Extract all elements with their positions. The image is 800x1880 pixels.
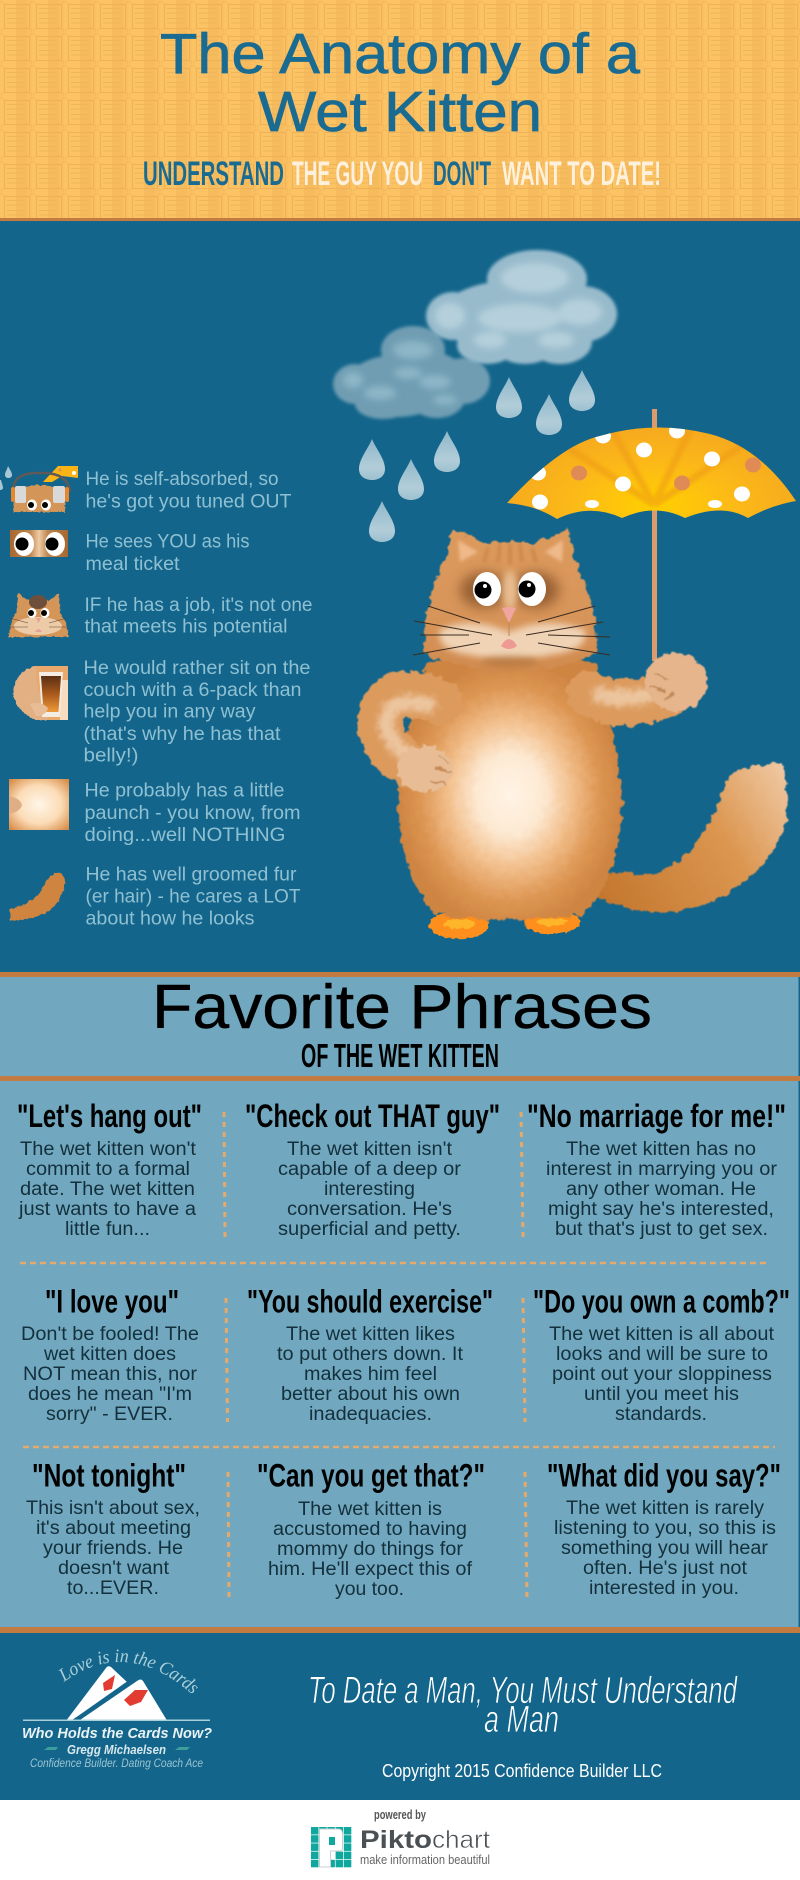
list item: paunch <box>9 779 300 846</box>
text: tuned out: He is self-absorbed, so <box>86 469 278 490</box>
logo: who holds the cards now: Gregg Michaelsen <box>67 1743 166 1757</box>
phrase: can you get that: "Can you get that?" <box>257 1458 485 1494</box>
text: paunch: He probably has a little <box>84 780 284 802</box>
tagline: a Man <box>484 1699 559 1741</box>
phrase: do you own a comb: standards. <box>615 1404 707 1425</box>
text: meal ticket: meal ticket <box>86 554 180 575</box>
text: job: IF he has a job, it's not one <box>84 595 312 616</box>
text: couch: belly!) <box>84 746 138 766</box>
phrase: no marriage for me: might say he's interested, <box>548 1199 774 1220</box>
logo: who holds the cards now <box>22 1649 212 1770</box>
phrase: not tonight: to...EVER. <box>67 1578 159 1599</box>
list item: fur <box>10 864 301 930</box>
text: job: that meets his potential <box>84 616 288 638</box>
phrase: you should exercise: The wet kitten likes <box>286 1324 455 1345</box>
phrase: what did you say: interested in you. <box>589 1578 739 1599</box>
icon: belly crop <box>9 779 69 830</box>
phrase: let's hang out: commit to a formal <box>26 1159 190 1180</box>
heading <box>152 973 652 1074</box>
icon: eyes crop <box>10 530 68 557</box>
phrase: no marriage for me: but that's just to get sex. <box>555 1219 768 1240</box>
phrase: i love you: Don't be fooled! The <box>21 1324 199 1345</box>
subtitle <box>143 155 661 193</box>
phrase: not tonight: "Not tonight" <box>32 1458 186 1494</box>
phrase: not tonight: doesn't want <box>58 1558 170 1579</box>
title: The Anatomy of a <box>160 22 640 86</box>
phrase: can you get that: The wet kitten is <box>298 1499 442 1520</box>
phrase: you should exercise: better about his own <box>281 1384 460 1405</box>
icon: piktochart logo <box>311 1827 351 1867</box>
subtitle: THE GUY YOU <box>292 155 423 193</box>
phrase: not tonight: it's about meeting <box>36 1518 191 1539</box>
icon: eyes <box>473 572 546 606</box>
phrase: can you get that: accustomed to having <box>273 1519 467 1540</box>
icon: head <box>413 529 610 672</box>
icon: rain drops <box>359 370 595 542</box>
phrase: do you own a comb: The wet kitten is all about <box>549 1324 775 1345</box>
phrase: can you get that <box>257 1458 485 1600</box>
icon: nose and mouth <box>501 607 517 649</box>
text: couch <box>84 658 310 766</box>
phrase: no marriage for me: interest in marrying you or <box>546 1159 778 1180</box>
text: fur: (er hair) - he cares a LOT <box>86 886 301 908</box>
wordmark: make information beautiful <box>360 1853 490 1867</box>
phrase: not tonight <box>26 1458 200 1599</box>
text: fur <box>86 864 301 930</box>
phrase: not tonight: your friends. He <box>43 1538 183 1559</box>
logo: who holds the cards now: Who Holds the Cards Now? <box>22 1725 212 1742</box>
icon: body <box>398 652 622 920</box>
subtitle: UNDERSTAND <box>143 155 284 193</box>
phrase: i love you: does he mean "I'm <box>28 1384 192 1405</box>
phrase: do you own a comb: point out your sloppiness <box>552 1364 772 1385</box>
copyright: Copyright 2015 Confidence Builder LLC <box>382 1761 662 1781</box>
tagline <box>308 1670 738 1741</box>
phrase: let's hang out: The wet kitten won't <box>20 1139 197 1160</box>
icon: left arm <box>380 694 453 792</box>
phrase: what did you say: often. He's just not <box>583 1558 748 1579</box>
phrase: i love you: "I love you" <box>45 1284 179 1320</box>
icon: umbrella <box>507 409 796 661</box>
wordmark <box>360 1826 490 1867</box>
phrase: do you own a comb: looks and will be sure to <box>556 1344 768 1365</box>
text: fur: He has well groomed fur <box>86 864 297 886</box>
phrase: what did you say <box>547 1458 781 1599</box>
title <box>160 22 640 144</box>
title: Wet Kitten <box>258 80 542 144</box>
list item: tuned out <box>0 466 292 512</box>
phrase: check out that guy: "Check out THAT guy" <box>245 1098 500 1134</box>
list item: job <box>8 593 312 638</box>
icon: upper cloud <box>426 250 617 364</box>
text: tuned out <box>86 469 292 512</box>
logo: who holds the cards now: Love is in the Cards <box>58 1649 198 1694</box>
panel: footer <box>0 1627 800 1800</box>
text: job <box>84 595 312 638</box>
phrase: what did you say: The wet kitten is rarely <box>566 1498 765 1519</box>
phrase: no marriage for me: The wet kitten has no <box>566 1139 756 1160</box>
icon: tail <box>597 764 787 912</box>
icon: tail crop <box>10 873 65 921</box>
phrase: you should exercise: inadequacies. <box>309 1404 432 1425</box>
phrase: can you get that: you too. <box>335 1579 404 1600</box>
phrase: can you get that: him. He'll expect this of <box>268 1559 473 1580</box>
text: powered by: powered by <box>374 1808 426 1822</box>
text: meal ticket <box>86 532 250 575</box>
icon: lower cloud <box>333 326 490 419</box>
panel: powered by piktochart <box>0 1800 800 1880</box>
phrase: check out that guy: superficial and petty. <box>278 1219 461 1240</box>
phrase: check out that guy: The wet kitten isn't <box>287 1139 453 1160</box>
text: meal ticket: He sees YOU as his <box>86 532 250 552</box>
phrase: you should exercise: makes him feel <box>304 1364 437 1385</box>
phrase: what did you say: something you will hear <box>561 1538 769 1559</box>
wordmark: chart <box>432 1826 490 1854</box>
phrase: let's hang out: date. The wet kitten <box>20 1179 195 1200</box>
icon: paw with beer <box>13 666 68 720</box>
phrase: you should exercise: to put others down. It <box>277 1344 464 1365</box>
phrase: you should exercise: "You should exercise" <box>247 1284 493 1320</box>
phrase: check out that guy: interesting <box>324 1179 415 1200</box>
icon: whiskers <box>413 606 610 655</box>
subtitle: DON'T <box>433 155 491 193</box>
logo: who holds the cards now: Confidence Builder. Dating Coach Ace <box>30 1758 203 1770</box>
panel: favorite phrases <box>0 972 800 1632</box>
icon: feet <box>429 910 580 939</box>
list item: meal ticket <box>10 530 250 575</box>
phrase: let's hang out: little fun... <box>65 1219 150 1240</box>
phrase: i love you: wet kitten does <box>43 1344 176 1365</box>
icon: kitten face <box>8 593 69 637</box>
subtitle: WANT TO DATE! <box>502 155 661 193</box>
illustration: clouds and rain <box>333 250 617 542</box>
text: fur: about how he looks <box>86 908 254 930</box>
phrase: what did you say: listening to you, so this is <box>554 1518 776 1539</box>
dashed dividers <box>20 1112 775 1597</box>
text: couch: He would rather sit on the <box>84 658 310 679</box>
phrase: let's hang out <box>17 1098 202 1240</box>
header panel <box>0 0 800 222</box>
phrase: let's hang out: "Let's hang out" <box>17 1098 202 1134</box>
text: tuned out: he's got you tuned OUT <box>86 492 292 512</box>
list item: couch <box>13 658 310 766</box>
icon: headphones kitten <box>0 466 78 512</box>
illustration: kitten <box>380 529 787 939</box>
phrase: let's hang out: just wants to have a <box>18 1199 196 1220</box>
phrase: do you own a comb <box>533 1284 790 1425</box>
phrase: check out that guy <box>245 1098 500 1240</box>
wordmark: Pikto <box>360 1826 432 1854</box>
text: couch: couch with a 6-pack than <box>84 680 302 701</box>
phrase: can you get that: mommy do things for <box>277 1539 464 1560</box>
icon: right arm <box>590 653 707 711</box>
text: paunch <box>84 780 300 846</box>
phrase: check out that guy: capable of a deep or <box>278 1159 462 1180</box>
text: paunch: doing...well NOTHING <box>84 825 286 846</box>
phrase: i love you: sorry" - EVER. <box>46 1404 173 1425</box>
phrase: not tonight: This isn't about sex, <box>26 1498 200 1519</box>
panel: anatomy <box>0 221 800 972</box>
phrase: no marriage for me: any other woman. He <box>566 1179 756 1200</box>
heading: Favorite Phrases <box>152 973 652 1042</box>
heading: OF THE WET KITTEN <box>301 1037 499 1074</box>
phrase: i love you <box>21 1284 199 1425</box>
phrase: i love you: NOT mean this, nor <box>23 1364 198 1385</box>
phrase: you should exercise <box>247 1284 493 1425</box>
text: couch: (that's why he has that <box>84 724 281 745</box>
phrase: do you own a comb: until you meet his <box>584 1384 739 1405</box>
phrase: no marriage for me <box>527 1098 786 1240</box>
text: paunch: paunch - you know, from <box>84 803 300 824</box>
text: couch: help you in any way <box>84 702 256 722</box>
phrase: check out that guy: conversation. He's <box>287 1199 452 1220</box>
